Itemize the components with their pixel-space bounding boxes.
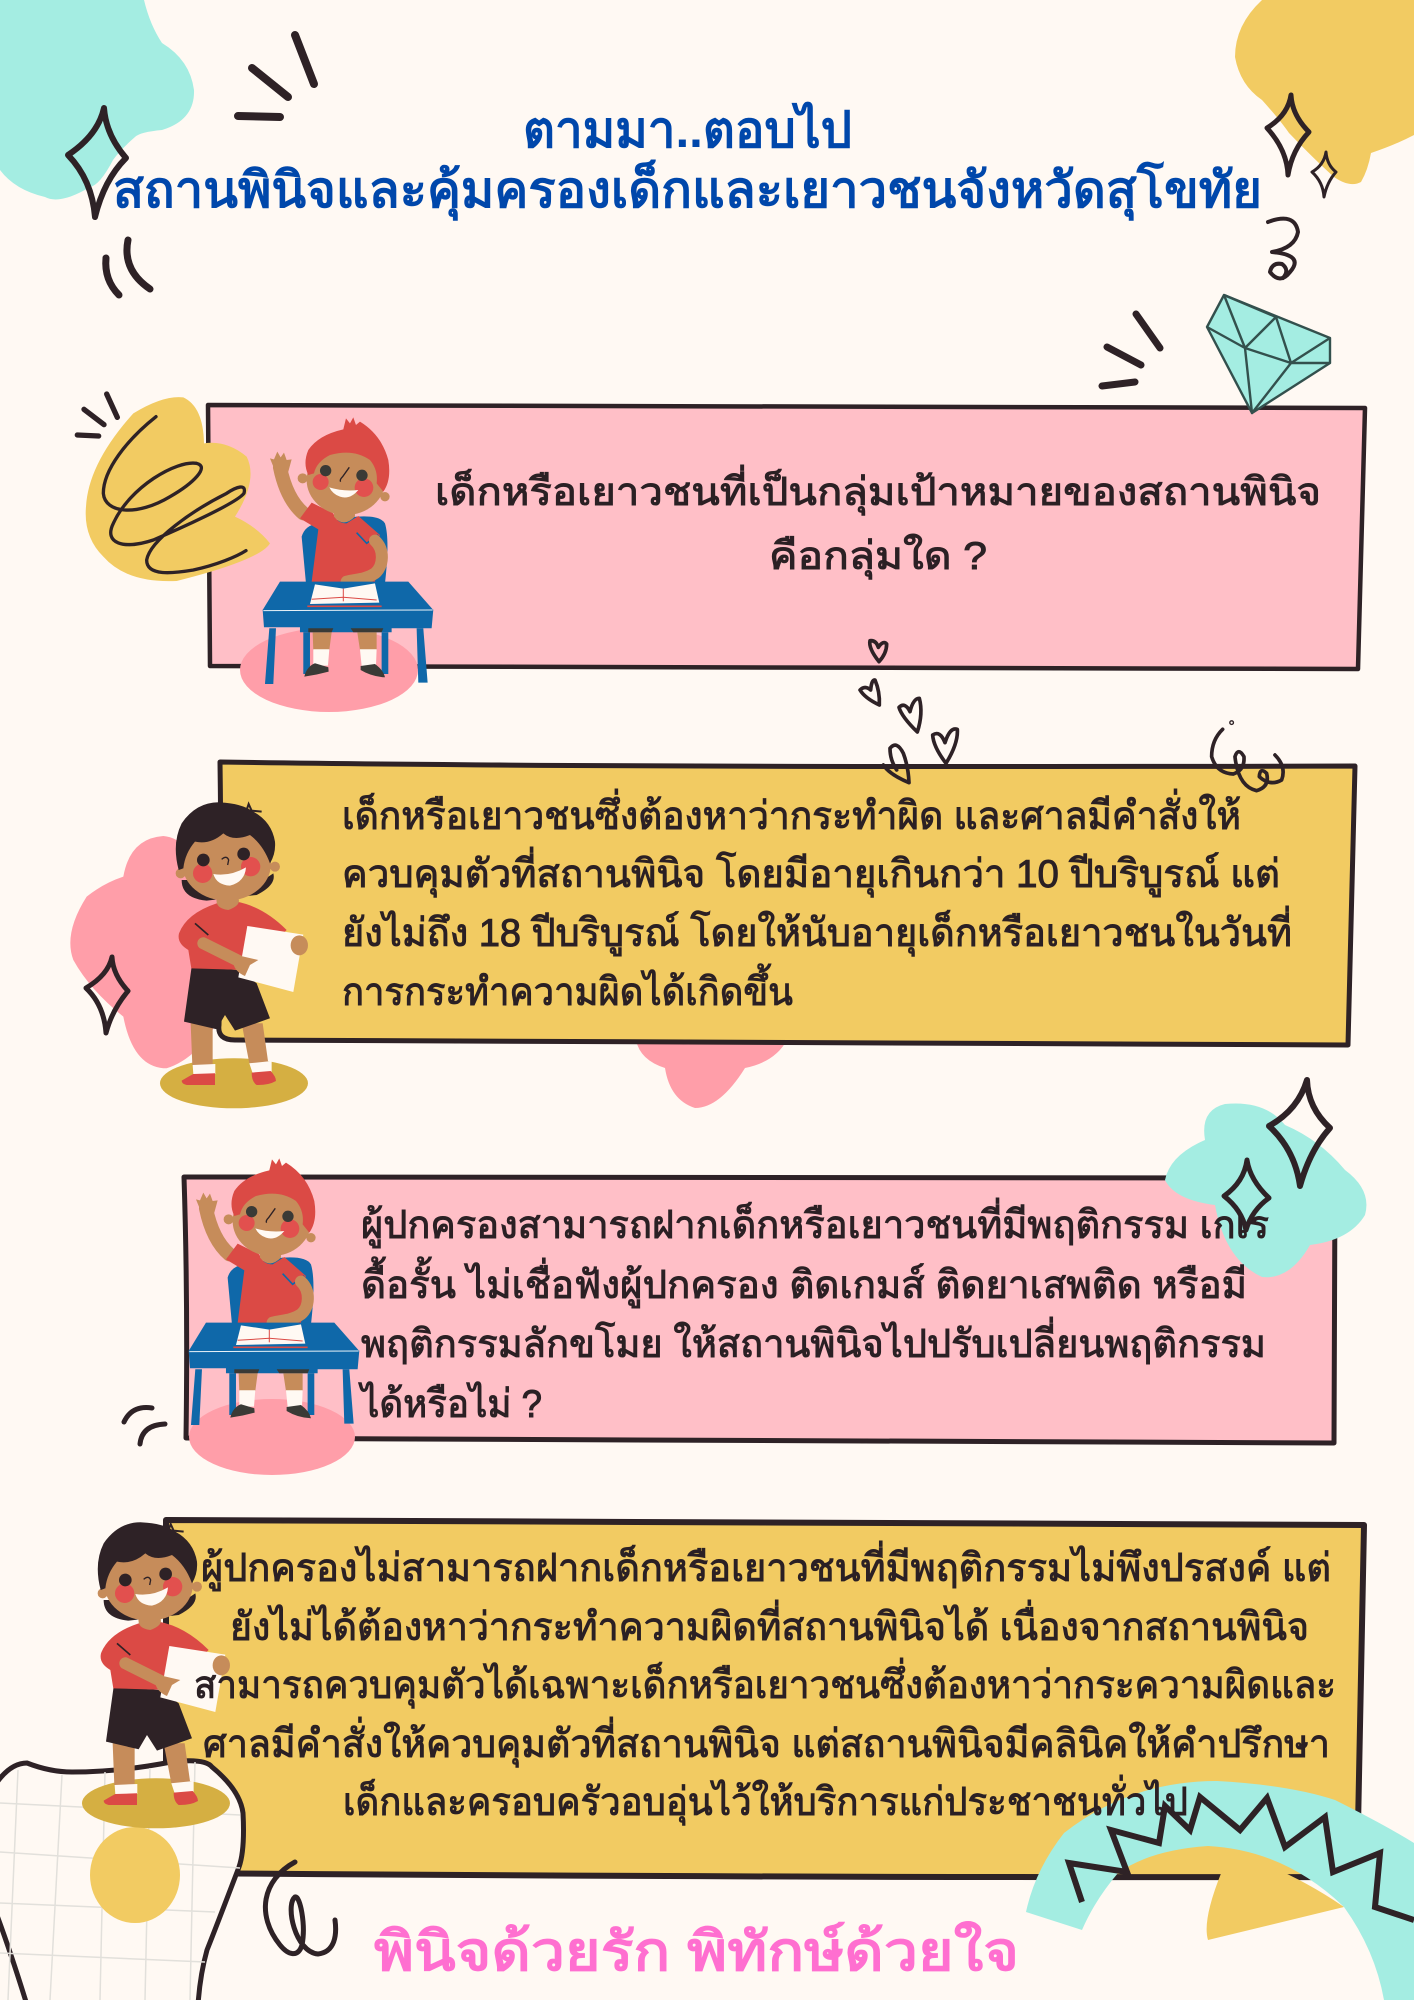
text: answer 1: ควบคุมตัวที่สถานพินิจ โดยมีอายุเกินกว่า 10 ปีบริบูรณ์ แต่ <box>342 847 1280 898</box>
text: question 2: ได้หรือไม่ ? <box>358 1382 542 1426</box>
title: ตามมา..ตอบไป <box>523 101 852 158</box>
text: question 1: คือกลุ่มใด ? <box>769 534 987 580</box>
text: answer 2: เด็กและครอบครัวอบอุ่นไว้ให้บริการแก่ประชาชนทั่วไป <box>343 1775 1188 1826</box>
diamond icon <box>1207 295 1330 413</box>
sparkle: top left <box>68 108 126 217</box>
text: answer 2: สามารถควบคุมตัวได้เฉพาะเด็กหรือเยาวชนซึ่งต้องหาว่ากระความผิดและ <box>194 1658 1336 1709</box>
hearts and curl <box>860 641 1283 791</box>
swoosh marks: panel 3 bottom-left <box>124 1408 165 1444</box>
text: question 2: ผู้ปกครองสามารถฝากเด็กหรือเยาวชนที่มีพฤติกรรม เกเร <box>361 1198 1269 1248</box>
pink ellipse: under desk 2 <box>189 1399 355 1475</box>
blob and scribble: panel 1 left <box>77 394 270 581</box>
burst marks: top <box>238 35 314 117</box>
text: answer 1: การกระทำความผิดได้เกิดขึ้น <box>342 963 793 1014</box>
text: answer 1: เด็กหรือเยาวชนซึ่งต้องหาว่ากระทำผิด และศาลมีคำสั่งให้ <box>342 789 1241 838</box>
curl: bottom <box>265 1862 336 1954</box>
title: สถานพินิจและคุ้มครองเด็กและเยาวชนจังหวัดสุโขทัย <box>113 159 1262 221</box>
text: question 1: เด็กหรือเยาวชนที่เป็นกลุ่มเป้าหมายของสถานพินิจ <box>435 465 1321 516</box>
sparkle: panel 3 small <box>1224 1160 1269 1230</box>
text: question 1 <box>435 465 1321 580</box>
blob: yellow in grid <box>90 1827 180 1923</box>
title <box>113 101 1262 221</box>
text: answer 2: ศาลมีคำสั่งให้ควบคุมตัวที่สถานพินิจ แต่สถานพินิจมีคลินิคให้คำปรึกษา <box>203 1717 1330 1768</box>
grid blob: bottom-left <box>0 1761 244 2000</box>
panel 4: yellow answer <box>166 1520 1364 1877</box>
character: boy with paper 2 <box>82 1522 230 1828</box>
slogan: พินิจด้วยรัก พิทักษ์ด้วยใจ <box>374 1920 1019 1982</box>
text: answer 2 <box>194 1541 1336 1826</box>
sparkle: top right small <box>1312 152 1336 197</box>
pink ellipse: under desk 1 <box>240 628 418 712</box>
sparkle: panel 3 large <box>1269 1080 1330 1186</box>
text: answer 1 <box>342 789 1292 1014</box>
text: question 2: พฤติกรรมลักขโมย ให้สถานพินิจไปปรับเปลี่ยนพฤติกรรม <box>361 1317 1266 1366</box>
blob: teal on panel 3 <box>1165 1103 1366 1277</box>
text: answer 1: ยังไม่ถึง 18 ปีบริบูรณ์ โดยให้นับอายุเด็กหรือเยาวชนในวันที่ <box>342 906 1292 957</box>
blob: top-left teal <box>0 0 194 199</box>
arch: bottom-right <box>1026 1781 1414 2000</box>
text: question 2: ดื้อรั้น ไม่เชื่อฟังผู้ปกครอง ติดเกมส์ ติดยาเสพติด หรือมี <box>361 1256 1247 1308</box>
panel 3: pink question <box>184 1177 1335 1443</box>
text: question 2 <box>358 1198 1269 1426</box>
blob: pink left of panel 2 <box>70 836 227 1068</box>
text: answer 2: ยังไม่ได้ต้องหาว่ากระทำความผิดที่สถานพินิจได้ เนื่องจากสถานพินิจ <box>230 1600 1309 1649</box>
character: boy with paper 1 <box>160 802 308 1108</box>
squiggle: top right <box>1268 219 1298 278</box>
blob: pink behind panel 2 bottom <box>636 1040 787 1108</box>
swoosh marks: left <box>106 240 150 295</box>
sparkle: panel 2 <box>86 957 128 1033</box>
character: boy at desk 2 <box>189 1158 359 1425</box>
burst marks: above first panel <box>1102 314 1160 386</box>
sparkle: top right large <box>1267 95 1309 175</box>
panel 1: pink question <box>208 405 1365 669</box>
text: answer 2: ผู้ปกครองไม่สามารถฝากเด็กหรือเยาวชนที่มีพฤติกรรมไม่พึงปรสงค์ แต่ <box>201 1541 1331 1591</box>
panel 2: yellow answer <box>219 762 1355 1045</box>
character: boy at desk 1 <box>263 417 433 684</box>
blob: top-right yellow <box>1235 0 1414 184</box>
zigzag line <box>1069 1797 1414 1920</box>
